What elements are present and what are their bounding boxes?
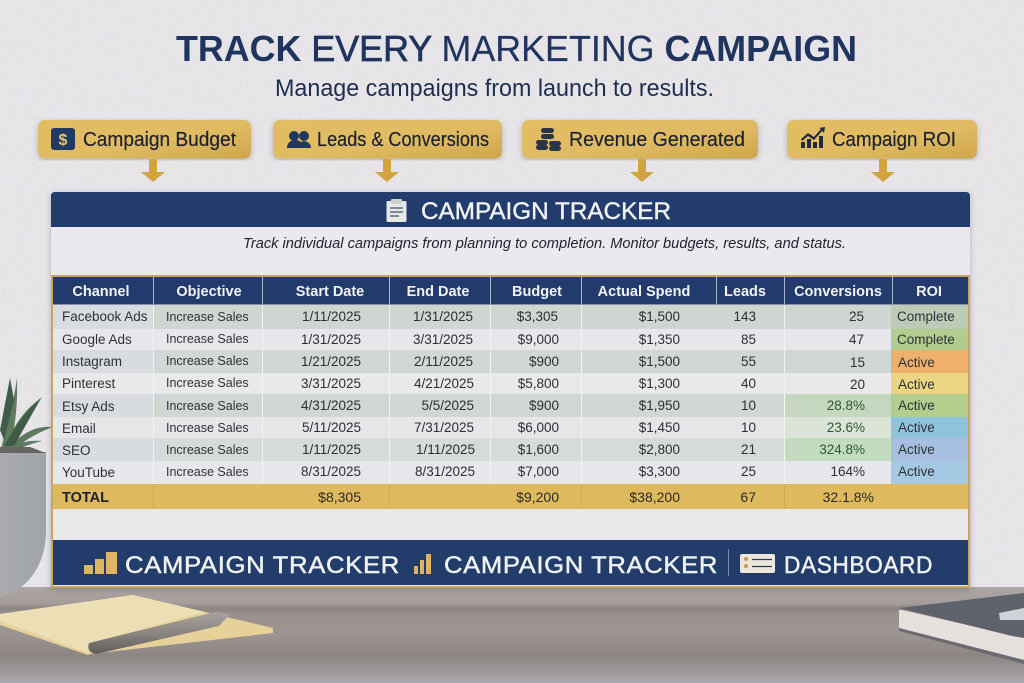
table header row: ROI — [916, 284, 942, 300]
row: Etsy Ads: 5/5/2025 — [421, 398, 474, 413]
row: Instagram: 55 — [741, 354, 756, 369]
row: Google Ads: 47 — [849, 332, 864, 347]
callout: revenue generated — [522, 120, 758, 158]
row: SEO: 1/11/2025 — [302, 442, 361, 457]
row: total: $38,200 — [629, 489, 680, 505]
icon: coins — [536, 128, 561, 151]
footer bar: DASHBOARD — [784, 552, 933, 579]
footer bar: CAMPAIGN TRACKER — [125, 552, 400, 579]
row: Etsy Ads: 10 — [741, 398, 756, 413]
row: Etsy Ads: $900 — [529, 398, 559, 413]
row: Email: Active — [898, 420, 935, 435]
table header row: Channel — [72, 284, 130, 300]
title: TRACK EVERY MARKETING CAMPAIGN — [176, 28, 857, 69]
subtitle: Manage campaigns from launch to results. — [275, 75, 714, 102]
blank paper strip — [53, 509, 968, 539]
row: Email: Increase Sales — [166, 421, 249, 435]
row: Instagram: Active — [898, 355, 935, 370]
data table — [51, 275, 970, 509]
row: SEO: 324.8% — [819, 442, 865, 457]
arrow: campaign budget — [141, 159, 165, 182]
row: Google Ads: $1,350 — [639, 332, 680, 347]
row: Facebook Ads: 25 — [849, 309, 864, 324]
table header row: Budget — [512, 284, 562, 300]
row: Instagram: 2/11/2025 — [414, 354, 473, 369]
row: SEO: Active — [898, 442, 935, 457]
icon: bar chart large — [84, 552, 117, 574]
row: SEO: Increase Sales — [166, 443, 249, 457]
row: Instagram: 1/21/2025 — [301, 354, 361, 369]
row: Google Ads: Complete — [897, 332, 955, 347]
row: Instagram: Instagram — [62, 354, 122, 369]
row: YouTube: Active — [898, 464, 935, 479]
row: total — [53, 484, 968, 509]
row: Pinterest: 3/31/2025 — [301, 376, 361, 391]
callout: campaign roi: Campaign ROI — [832, 129, 956, 151]
decorative notepad and pen — [0, 595, 273, 655]
row: Google Ads: 1/31/2025 — [301, 332, 361, 347]
icon: dollar — [51, 128, 75, 150]
row: Email: $6,000 — [518, 420, 559, 435]
row: SEO: 21 — [741, 442, 756, 457]
decorative plant — [0, 378, 53, 597]
row: total: 67 — [740, 489, 756, 505]
icon: people — [287, 131, 311, 148]
row: Email: Email — [62, 421, 96, 436]
row: Etsy Ads: Increase Sales — [166, 399, 249, 413]
arrow: leads — [375, 159, 399, 182]
row: Pinterest: Active — [898, 377, 935, 392]
row: Pinterest: $5,800 — [518, 376, 559, 391]
row: Email — [62, 420, 935, 436]
row: total: TOTAL — [62, 490, 109, 506]
row: total: 32.1.8% — [823, 489, 874, 505]
row: YouTube: 25 — [741, 464, 756, 479]
row: Email: 23.6% — [827, 420, 865, 435]
row: Facebook Ads: 1/11/2025 — [302, 309, 361, 324]
arrow: roi — [871, 159, 895, 182]
row: SEO: SEO — [62, 443, 91, 458]
panel header bar — [51, 192, 970, 227]
panel: campaign tracker — [51, 192, 970, 588]
table header row: Objective — [176, 284, 242, 300]
row: Facebook Ads: 1/31/2025 — [413, 309, 473, 324]
footer bar — [53, 540, 968, 585]
row: YouTube: $3,300 — [639, 464, 680, 479]
row: total: $8,305 — [318, 489, 361, 505]
row: Google Ads: Increase Sales — [166, 332, 249, 346]
row: Facebook Ads: Complete — [897, 309, 955, 324]
row: Facebook Ads: $3,305 — [517, 309, 558, 324]
callout: campaign budget — [38, 120, 251, 158]
row: Instagram: $1,500 — [639, 354, 680, 369]
row: Etsy Ads: Active — [898, 398, 935, 413]
table header row: Leads — [724, 284, 766, 300]
row: SEO: $2,800 — [639, 442, 680, 457]
panel description: Track individual campaigns from planning to completion. Monitor budgets, results, and status. — [243, 236, 846, 252]
row: Pinterest: 40 — [741, 376, 756, 391]
row: YouTube: YouTube — [62, 465, 115, 480]
table header row: Actual Spend — [598, 284, 690, 300]
footer bar: CAMPAIGN TRACKER — [444, 552, 718, 579]
row: Pinterest: $1,300 — [639, 376, 680, 391]
row: YouTube: $7,000 — [518, 464, 559, 479]
callout: leads and conversions — [273, 120, 502, 158]
row: Google Ads: 85 — [741, 332, 756, 347]
row: Etsy Ads — [62, 398, 935, 414]
row: Email: 7/31/2025 — [414, 420, 474, 435]
row: Facebook Ads: $1,500 — [639, 309, 680, 324]
icon: dollar: $ — [59, 132, 68, 149]
row: Pinterest: 20 — [850, 377, 865, 392]
row: Instagram — [62, 354, 935, 370]
table header row: Conversions — [794, 284, 882, 300]
row: Email: 10 — [741, 420, 756, 435]
decorative book and pen — [899, 593, 1024, 664]
callout: revenue generated: Revenue Generated — [569, 129, 745, 151]
row: Pinterest: Pinterest — [62, 376, 116, 391]
row: Pinterest: 4/21/2025 — [414, 376, 474, 391]
row: YouTube: Increase Sales — [166, 465, 249, 479]
row: Facebook Ads: Facebook Ads — [62, 309, 148, 324]
callout: leads and conversions: Leads & Conversions — [317, 129, 489, 151]
panel heading: CAMPAIGN TRACKER — [421, 198, 671, 225]
row: Etsy Ads: Etsy Ads — [62, 399, 115, 414]
table header row — [72, 284, 942, 300]
table header row: Start Date — [296, 284, 364, 300]
row: Email: $1,450 — [639, 420, 680, 435]
row: Facebook Ads — [62, 309, 955, 324]
table header row: End Date — [407, 284, 469, 300]
row: SEO: 1/11/2025 — [416, 442, 475, 457]
row: Google Ads: 3/31/2025 — [413, 332, 473, 347]
row: SEO: $1,600 — [518, 442, 559, 457]
row: Etsy Ads: 28.8% — [827, 398, 865, 413]
row: Etsy Ads: 4/31/2025 — [301, 398, 361, 413]
arrow: revenue — [630, 159, 654, 182]
row backgrounds — [53, 305, 968, 484]
row: Pinterest — [62, 376, 935, 392]
row: YouTube: 8/31/2025 — [415, 464, 475, 479]
callout: campaign budget: Campaign Budget — [83, 129, 236, 151]
row: Facebook Ads: 143 — [733, 309, 756, 324]
row: Etsy Ads: $1,950 — [639, 398, 680, 413]
icon: bar chart small — [414, 554, 431, 574]
row: Instagram: $900 — [529, 354, 559, 369]
row: Email: 5/11/2025 — [302, 420, 361, 435]
row: Instagram: 15 — [850, 355, 865, 370]
gold frame — [52, 276, 969, 587]
callout: campaign roi — [787, 120, 977, 158]
row: Instagram: Increase Sales — [166, 354, 249, 368]
icon: growth chart — [801, 127, 825, 148]
row: Pinterest: Increase Sales — [166, 376, 249, 390]
row: YouTube — [62, 464, 935, 480]
row: Google Ads: Google Ads — [62, 332, 132, 347]
desk surface — [0, 587, 1024, 683]
icon: clipboard — [386, 199, 406, 222]
row: SEO — [62, 442, 935, 458]
row: Google Ads — [62, 332, 955, 347]
row: Facebook Ads: Increase Sales — [166, 310, 249, 324]
row: Google Ads: $9,000 — [518, 332, 559, 347]
row: YouTube: 164% — [830, 464, 865, 479]
row: total: $9,200 — [516, 489, 559, 505]
icon: dashboard list — [740, 554, 775, 573]
row: YouTube: 8/31/2025 — [301, 464, 361, 479]
